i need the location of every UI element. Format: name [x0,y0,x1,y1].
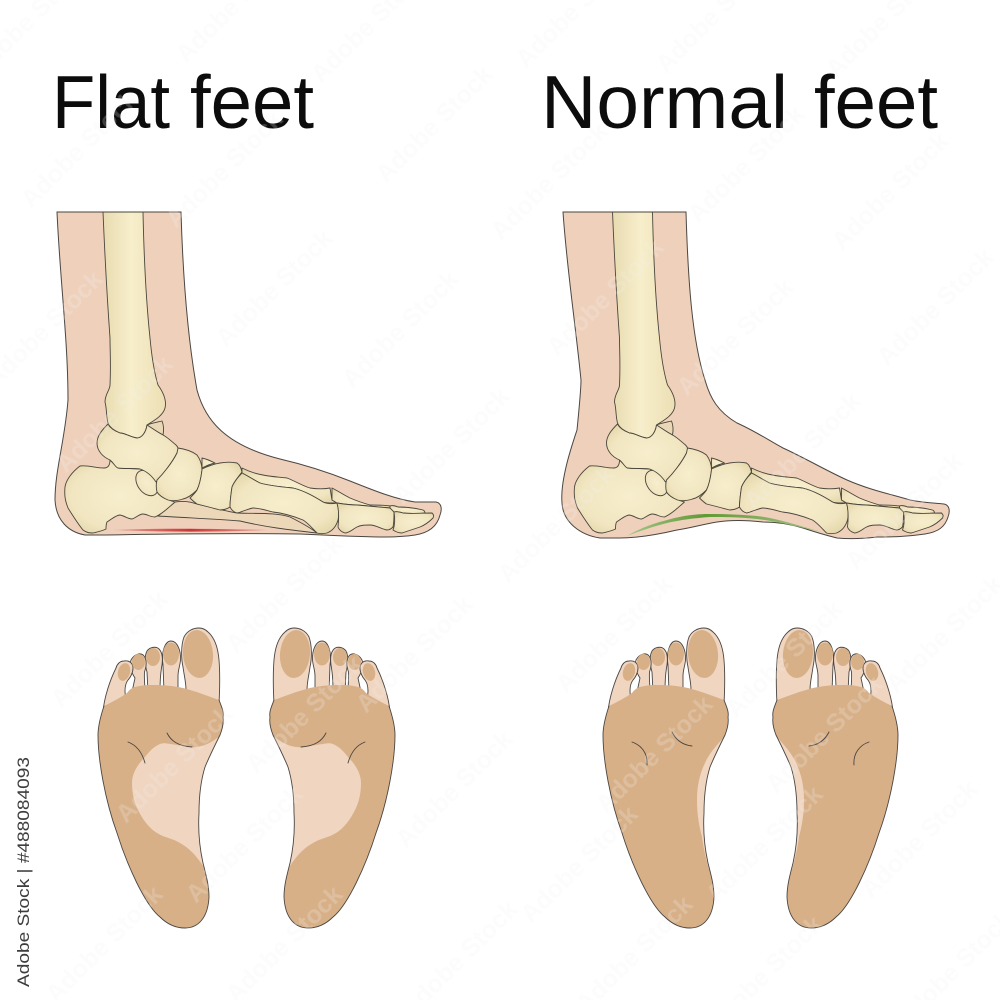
watermark pattern: Adobe Stock [210,224,338,352]
flat foot skin outline [55,212,441,537]
watermark pattern: Adobe Stock [541,233,669,361]
flattened plantar fascia (red) [113,529,268,532]
watermark pattern: Adobe Stock [485,117,613,245]
watermark pattern: Adobe Stock [220,530,348,658]
watermark pattern: Adobe Stock [50,350,178,478]
watermark pattern: Adobe Stock [110,700,238,828]
footprint: normal right foot [773,628,898,928]
watermark pattern: Adobe Stock [390,725,518,853]
side view: normal foot with bones [562,212,949,539]
watermark pattern: Adobe Stock [515,800,643,928]
watermark pattern: Adobe Stock [240,650,368,778]
watermark pattern: Adobe Stock [15,85,143,213]
flat foot bones [65,212,434,534]
collapsed mid-foot tissue [158,501,317,533]
watermark pattern: Adobe Stock [180,780,308,908]
side view: flat foot with bones [55,212,441,537]
arched plantar fascia (green) [627,514,822,536]
watermark pattern: Adobe Stock [871,243,999,371]
watermark pattern: Adobe Stock [760,670,888,798]
watermark pattern: Adobe Stock [336,265,464,393]
watermark pattern: Adobe Stock [738,387,866,515]
footprint: flat right foot [270,628,395,928]
watermark pattern: Adobe Stock [720,595,848,723]
title: Normal feet: Normal [541,60,788,144]
normal foot bones [574,212,943,534]
watermark pattern: Adobe Stock [350,590,478,718]
watermark pattern: Adobe Stock [855,775,983,903]
title: Flat feet: Flat [52,60,170,144]
watermark pattern: Adobe Stock [671,273,799,401]
watermark pattern: Adobe Stock [700,780,828,908]
watermark pattern: Adobe Stock [492,460,620,588]
footprint: normal left foot [603,628,728,928]
watermark pattern: Adobe Stock [387,382,515,510]
watermark pattern: Adobe Stock [370,60,498,188]
normal foot skin outline [562,212,949,539]
watermark pattern: Adobe Stock [160,105,288,233]
watermark pattern: Adobe Stock [826,127,954,255]
title: Normal feet [541,60,938,144]
watermark pattern: Adobe Stock [840,447,968,575]
title: Flat feet [52,60,314,144]
stock photo id, vertical: Adobe Stock | #488084093 [14,757,33,987]
watermark pattern: Adobe Stock [45,585,173,713]
watermark pattern: Adobe Stock [590,690,718,818]
footprint: flat left foot [98,628,223,928]
title: Normal feet: feet [814,60,938,144]
watermark pattern: Adobe Stock [682,100,810,228]
title: Flat feet: feet [190,60,314,144]
watermark pattern: Adobe Stock [550,570,678,698]
